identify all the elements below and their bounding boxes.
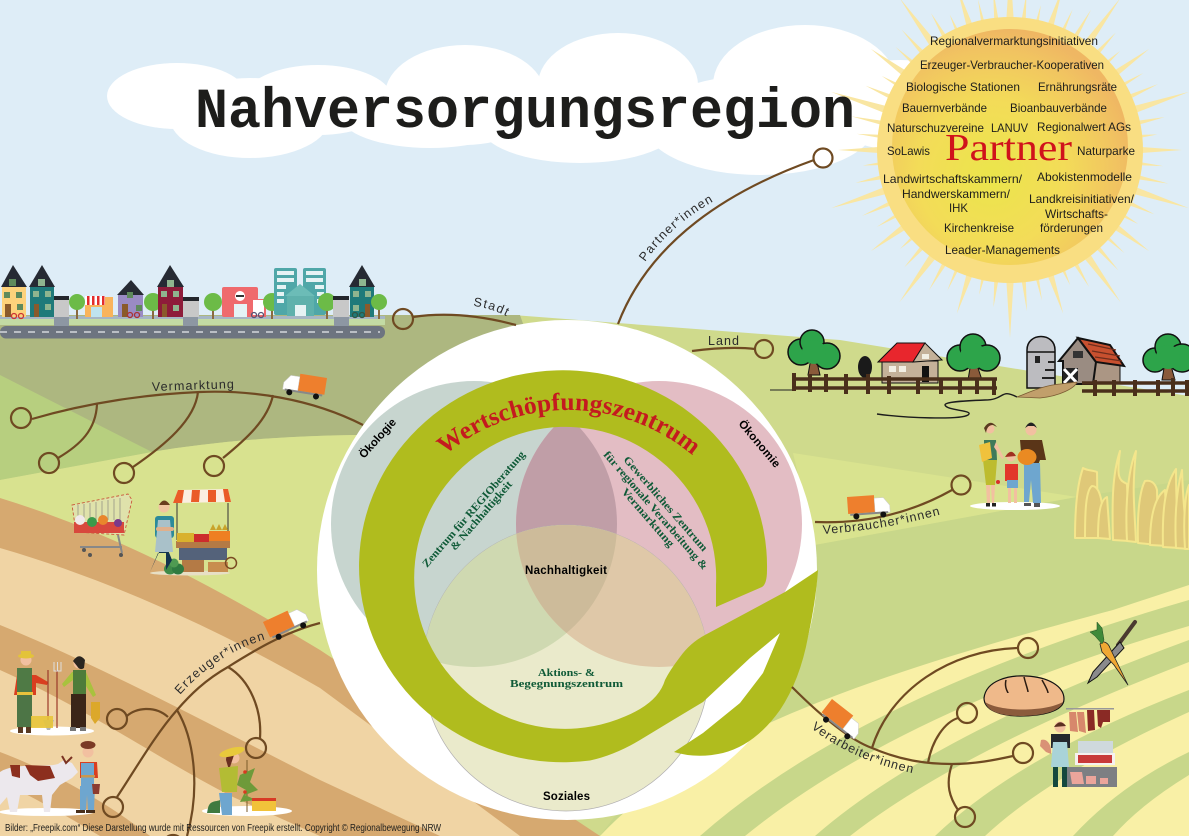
truck: Verbraucher (847, 494, 891, 520)
silo (1027, 336, 1055, 388)
partner names: Naturschuzvereine (887, 121, 984, 135)
illustration: carrot and knife (1088, 622, 1135, 685)
barn (1059, 338, 1124, 384)
white disc (317, 320, 817, 820)
woman (979, 423, 1004, 506)
title: Nahversorgungsregion (195, 81, 855, 145)
partner names: Bioanbauverbände (1010, 101, 1107, 115)
tree (144, 293, 162, 319)
partner names: Ernährungsräte (1038, 80, 1117, 94)
illustration: gardener with tomatoes (202, 745, 292, 816)
cow (0, 756, 78, 812)
sun rays (821, 0, 1189, 338)
partner names: Kirchenkreise (944, 221, 1014, 235)
label: Nachhaltigkeit: Nachhaltigkeit (525, 565, 607, 577)
connector: Erzeuger (102, 622, 320, 836)
connector: Vermarktung (11, 377, 363, 483)
town street scene (0, 265, 387, 338)
tree (263, 293, 281, 319)
connector: Verbraucher (814, 474, 972, 534)
partner names: Biologische Stationen (906, 80, 1020, 94)
partner names: Regionalvermarktungsinitiativen (930, 34, 1098, 48)
tree right (1143, 334, 1189, 380)
cloud behind title (107, 25, 980, 175)
centre diagram: Wertschöpfungszentrum (317, 320, 818, 820)
house: teal right (349, 265, 375, 317)
field stripes lower left (0, 498, 600, 836)
partner names: Regionalwert AGs (1037, 120, 1131, 134)
butcher figure (1040, 722, 1070, 787)
partner names: Wirtschafts- (1045, 207, 1108, 221)
partner names: Erzeuger-Verbraucher-Kooperativen (920, 58, 1104, 72)
connector: Verbraucher: Verbraucher*innen (822, 508, 940, 534)
sun disc (877, 17, 1143, 283)
tree (318, 293, 336, 319)
illustration: market vendor (150, 489, 236, 576)
connector: Verarbeiter: Verarbeiter*innen (814, 721, 913, 773)
text: Aktions- & Begegnungszentrum (510, 667, 623, 690)
label: Ökonomie: Ökonomie (736, 418, 783, 470)
green ring and leaf (359, 370, 818, 762)
text: Zentrum für REGIOberatung: & Nachhaltigkeit (448, 478, 515, 553)
vendor (150, 500, 174, 572)
text: Aktions- & Begegnungszentrum: Begegnungszentrum (510, 678, 623, 690)
farmer with vest (62, 656, 100, 731)
venn diagram (331, 381, 802, 811)
truck: Vermarktung (282, 371, 327, 401)
tomato crate (252, 798, 276, 811)
garage (183, 297, 199, 317)
tomato plant (237, 760, 258, 812)
connector: Vermarktung: Vermarktung (152, 377, 234, 394)
garage (54, 296, 69, 317)
farmhouse (878, 343, 942, 383)
partner names: Bauernverbände (902, 101, 987, 115)
farmer with hat (14, 651, 48, 733)
connector: Erzeuger: Erzeuger*innen (174, 634, 264, 694)
counter (1067, 741, 1117, 787)
tree middle (947, 334, 1000, 380)
truck: Verarbeiter (818, 699, 865, 743)
house: yellow (1, 265, 27, 317)
illustration: butcher (1040, 708, 1117, 787)
connector: Land: Land (708, 334, 739, 348)
wheat field (1075, 451, 1189, 549)
shop (85, 296, 113, 317)
illustration: farmers (10, 651, 100, 736)
tree (204, 293, 222, 319)
meat rack (1066, 708, 1114, 733)
partner names: förderungen (1040, 221, 1103, 235)
dirt path (877, 382, 1077, 418)
footer credit: Bilder: „Freepik.com“ Diese Darstellung wurde mit Ressourcen von Freepik erstellt. Copyright © Regionalbewegung NRW (5, 822, 441, 834)
house: maroon (157, 265, 184, 317)
connector: Partner: Partner*innen (638, 196, 712, 262)
partner names: Landkreisinitiativen/ (1029, 192, 1135, 206)
partner names: Landwirtschaftskammern/ (883, 172, 1023, 186)
illustration: bread (984, 676, 1064, 716)
black bush (858, 356, 872, 378)
partner names (883, 34, 1135, 257)
child (996, 452, 1018, 503)
house: teal (29, 265, 55, 317)
tree (69, 294, 85, 319)
connector: Stadt (392, 298, 516, 330)
partner names: SoLawis (887, 144, 930, 158)
heading: Partner: Partner (945, 127, 1072, 169)
partner names: Abokistenmodelle (1037, 170, 1132, 184)
connector: Partner (617, 147, 834, 324)
text: Gewerbliches Zentrum: Gewerbliches Zentrum (621, 454, 710, 554)
field stripes lower right (600, 585, 1189, 836)
label: Ökologie: Ökologie (357, 416, 399, 461)
sun with partner list (821, 0, 1189, 338)
street (0, 316, 385, 338)
fences (770, 373, 1189, 396)
heading: Wertschöpfungszentrum: Wertschöpfungszentrum (435, 392, 698, 455)
illustration: cow and farmer (0, 741, 100, 816)
garage (333, 296, 349, 317)
truck: Erzeuger (263, 604, 311, 643)
partner names: Leader-Managements (945, 243, 1060, 257)
farmer with bucket (76, 741, 100, 813)
partner names: Handwerskammern/ (902, 187, 1011, 201)
tree (371, 294, 387, 319)
connector: Land (692, 334, 773, 358)
house: purple (117, 280, 144, 317)
illustration: family (970, 422, 1060, 510)
gym (222, 287, 266, 317)
text: Aktions- & Begegnungszentrum: Aktions- & (538, 667, 595, 679)
text: Gewerbliches Zentrum: Vermarktung (619, 486, 677, 550)
label: Soziales: Soziales (543, 791, 590, 803)
man with pumpkin (1018, 422, 1046, 507)
text: Gewerbliches Zentrum: für regionale Verarbeitung & (601, 449, 710, 572)
partner names: IHK (949, 201, 968, 215)
connector: Verarbeiter (791, 636, 1040, 828)
partner names: Naturparke (1077, 144, 1135, 158)
partner names: LANUV (991, 121, 1028, 135)
office towers (274, 268, 326, 316)
farm scene (770, 330, 1189, 418)
bicycles (12, 312, 364, 318)
landscape: hills and fields (0, 315, 1189, 836)
stall (164, 489, 236, 574)
illustration: shopping cart (72, 494, 132, 557)
fork and shovel (31, 662, 61, 730)
connector: Stadt: Stadt (474, 298, 510, 316)
tree left (788, 330, 840, 375)
text: Zentrum für REGIOberatung: Zentrum für REGIOberatung (420, 448, 528, 570)
